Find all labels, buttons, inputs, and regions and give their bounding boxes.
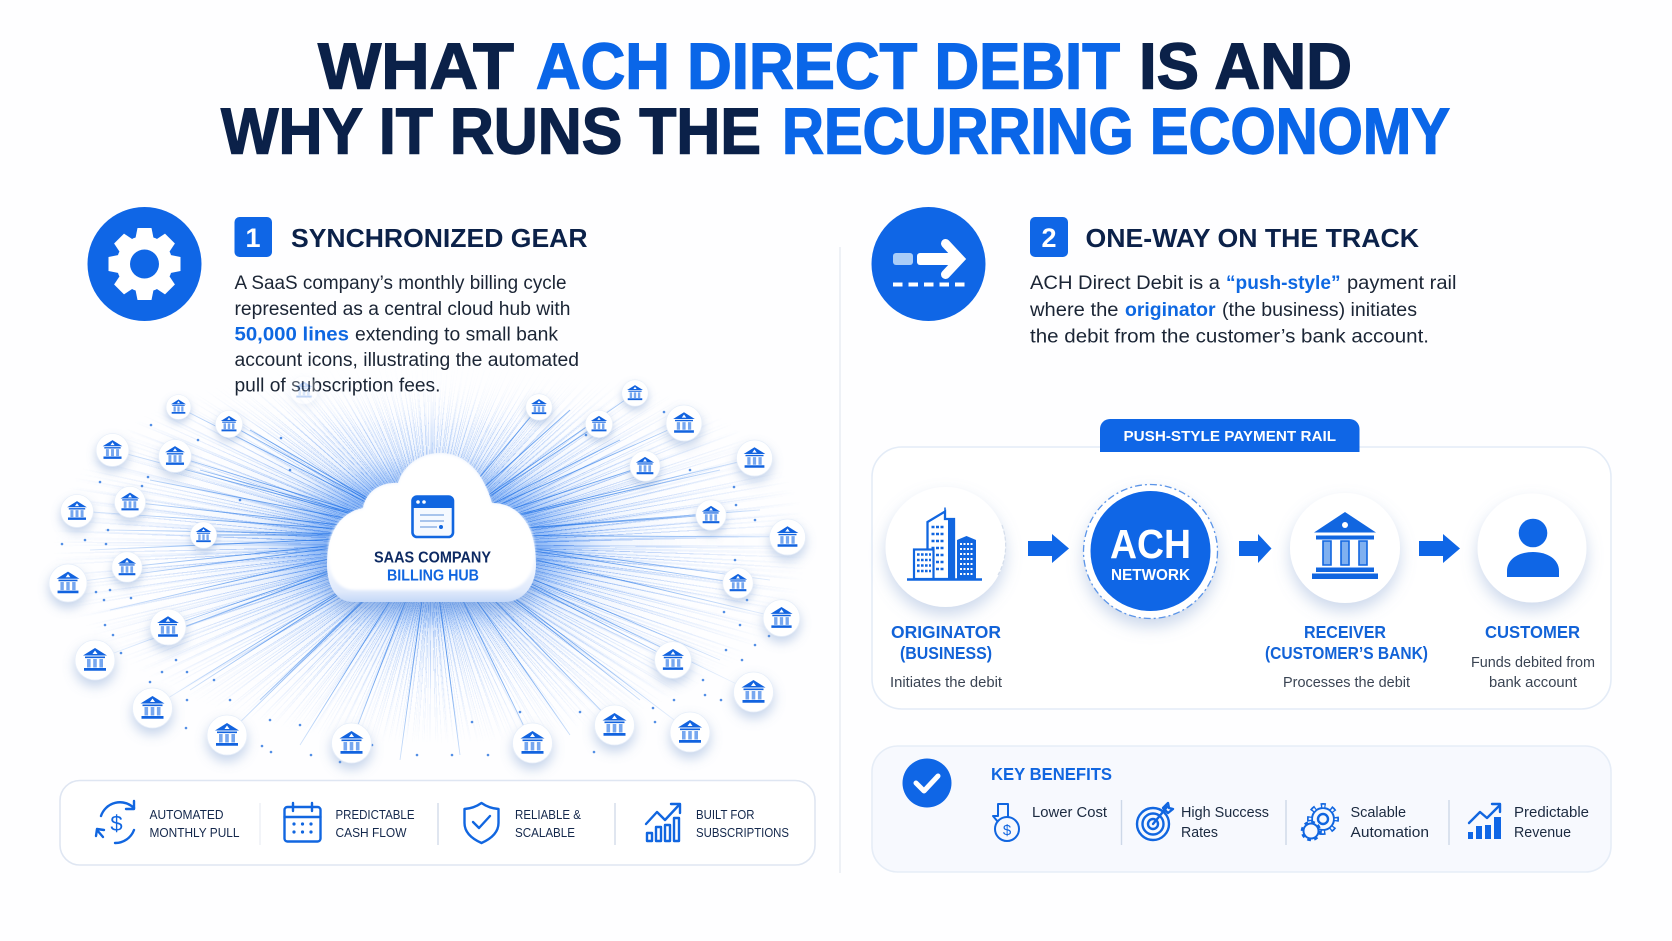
- benefit: scalable automation: [1302, 805, 1429, 841]
- icon: bank node: [666, 405, 702, 441]
- label: originator: ORIGINATOR: [891, 622, 1001, 642]
- panel: key benefits: [872, 746, 1611, 872]
- text block: section 1 description: pull of subscription fees.: [234, 376, 440, 396]
- icon: bank node: [96, 434, 129, 466]
- title: WHY IT RUNS THE: [221, 94, 761, 168]
- title: WHAT: [318, 30, 514, 102]
- icon: bank node: [734, 672, 774, 712]
- label: receiver: RECEIVER: [1304, 622, 1386, 642]
- title: [221, 30, 1450, 168]
- cloud label: BILLING HUB: [387, 568, 479, 584]
- benefit: high success rates: High Success: [1181, 805, 1269, 821]
- benefit: high success rates: Rates: [1181, 825, 1218, 841]
- label: automated monthly pull: AUTOMATED: [150, 808, 224, 822]
- text block: section 2 description: originator: [1125, 300, 1216, 321]
- icon: bank node: [215, 410, 243, 438]
- icon: automated pull: [96, 801, 134, 843]
- cloud label: SAAS COMPANY: [374, 550, 491, 566]
- arrow: [1419, 534, 1460, 563]
- badge: number 2: 2: [1041, 223, 1057, 253]
- icon: bank node: [526, 394, 552, 420]
- badge: number 2: [1030, 217, 1068, 257]
- icon: check badge: [902, 758, 952, 808]
- text block: section 2 description: payment rail: [1347, 273, 1456, 294]
- label: built for subscriptions: SUBSCRIPTIONS: [696, 826, 789, 840]
- label: predictable cash flow: [336, 808, 414, 840]
- icon: bank node: [585, 410, 613, 438]
- benefit: scalable automation: Automation: [1350, 825, 1429, 841]
- benefit: lower cost: $: [1003, 822, 1012, 839]
- icon: originator buildings: [886, 487, 1006, 607]
- panel: left feature strip: [60, 780, 815, 865]
- heading: key benefits: KEY BENEFITS: [991, 764, 1112, 784]
- node: ACH network: NETWORK: [1111, 567, 1190, 584]
- accent ray lines: [68, 393, 788, 760]
- icon: bank node: [207, 715, 247, 755]
- icon: growth chart: [646, 804, 680, 841]
- badge: number 1: 1: [245, 223, 261, 253]
- benefit: scalable automation: Scalable: [1350, 805, 1406, 821]
- icon: bank node: [166, 395, 191, 419]
- label: customer: Funds debited from: [1471, 655, 1595, 671]
- icon: bank node: [763, 600, 800, 636]
- icon: bank node: [112, 552, 142, 582]
- arrow: [1028, 534, 1069, 563]
- icon: bank node: [332, 723, 372, 763]
- label: built for subscriptions: BUILT FOR: [696, 808, 754, 822]
- label: reliable and scalable: [515, 808, 582, 840]
- icon: bank node: [150, 609, 186, 645]
- title: IS AND: [1139, 30, 1352, 102]
- badge: number 1: [234, 217, 272, 257]
- icon: gear: [88, 207, 202, 321]
- icon: bank node: [190, 522, 217, 548]
- cloud label: [374, 550, 491, 584]
- icon: bank node: [670, 712, 710, 752]
- text block: section 2 description: [1029, 273, 1456, 348]
- icon: receiver bank: [1290, 493, 1400, 603]
- text block: section 2 description: ACH Direct Debit is a: [1030, 273, 1220, 294]
- label: predictable cash flow: PREDICTABLE: [336, 808, 414, 822]
- accent dots: [62, 412, 769, 762]
- icon: bank node: [512, 723, 552, 763]
- icon: bank node: [622, 380, 648, 406]
- panel: section 1 header: [88, 207, 588, 396]
- text block: section 2 description: (the business) initiates: [1222, 300, 1417, 321]
- heading: one-way on the track: ONE-WAY ON THE TRACK: [1086, 223, 1419, 253]
- icon: bank node: [770, 519, 806, 555]
- panel: section 2 header: [872, 207, 1456, 348]
- text block: section 2 description: “push-style”: [1226, 273, 1340, 294]
- benefit: predictable revenue: [1468, 804, 1589, 841]
- icon: bank node: [594, 705, 634, 745]
- label: automated monthly pull: [150, 808, 240, 840]
- icon: billing window: [412, 496, 453, 537]
- title: RECURRING ECONOMY: [782, 94, 1450, 168]
- benefit: lower cost: Lower Cost: [1032, 805, 1107, 821]
- label: built for subscriptions: [696, 808, 789, 840]
- ray burst: 50,000 lines radiating from hub: [82, 390, 780, 732]
- label: customer: [1471, 622, 1595, 691]
- benefit: predictable revenue: Predictable: [1514, 805, 1589, 821]
- text block: section 2 description: the debit from the customer’s bank account.: [1030, 326, 1429, 348]
- icon: bank node: [736, 440, 772, 476]
- benefit: high success rates: [1137, 803, 1269, 841]
- title: ACH DIRECT DEBIT: [536, 30, 1120, 102]
- icon: customer: [1478, 494, 1586, 602]
- icon: bank node: [49, 564, 87, 602]
- tab: panel title: [1100, 419, 1360, 452]
- text block: section 1 description: 50,000 lines: [234, 324, 349, 346]
- chart: radial network of bank nodes around cloud hub: [49, 376, 806, 763]
- icon: calendar: [284, 803, 320, 842]
- benefit: predictable revenue: Revenue: [1514, 825, 1571, 841]
- label: originator: (BUSINESS): [900, 643, 992, 663]
- text block: section 2 description: where the: [1029, 300, 1118, 321]
- panel: push-style payment rail: [872, 419, 1611, 709]
- icon: bank node: [630, 451, 660, 481]
- heading: synchronized gear: SYNCHRONIZED GEAR: [291, 223, 588, 253]
- label: receiver: [1265, 622, 1428, 691]
- icon: bank node: [114, 486, 146, 518]
- soft fade above the ray burst: [41, 335, 821, 430]
- tab: panel title: PUSH-STYLE PAYMENT RAIL: [1124, 428, 1336, 445]
- text block: section 1 description: account icons, illustrating the automated: [234, 350, 579, 371]
- label: automated monthly pull: MONTHLY PULL: [150, 826, 240, 840]
- cloud hub: [327, 453, 536, 602]
- label: receiver: Processes the debit: [1283, 675, 1410, 691]
- icon: one-way arrow on track: [872, 207, 986, 321]
- label: predictable cash flow: CASH FLOW: [336, 826, 407, 840]
- benefit: lower cost: [993, 804, 1107, 841]
- node: ACH network: [1084, 484, 1218, 618]
- arrow: [1239, 534, 1272, 563]
- label: receiver: (CUSTOMER’S BANK): [1265, 643, 1428, 663]
- text block: section 1 description: represented as a central cloud hub with: [234, 299, 570, 320]
- text block: section 1 description: A SaaS company’s monthly billing cycle: [234, 273, 566, 294]
- icon: bank node: [132, 688, 172, 728]
- icon: bank node: [696, 500, 726, 530]
- icon: bank node: [159, 440, 191, 472]
- label: customer: CUSTOMER: [1485, 622, 1580, 642]
- label: customer: bank account: [1489, 675, 1577, 691]
- label: originator: [890, 622, 1002, 691]
- icon: bank node: [75, 640, 115, 680]
- label: reliable and scalable: SCALABLE: [515, 826, 575, 840]
- icon: bank node: [290, 376, 318, 404]
- icon: shield: [464, 803, 498, 843]
- node: ACH network: ACH: [1110, 521, 1191, 567]
- icon: bank node: [61, 495, 93, 527]
- icon: bank node: [723, 568, 753, 598]
- label: originator: Initiates the debit: [890, 675, 1002, 691]
- text block: section 1 description: extending to small bank: [355, 324, 559, 346]
- icon: automated pull: $: [110, 811, 123, 836]
- icon: bank node: [655, 642, 691, 678]
- text block: section 1 description: [234, 273, 579, 396]
- label: reliable and scalable: RELIABLE &: [515, 808, 582, 822]
